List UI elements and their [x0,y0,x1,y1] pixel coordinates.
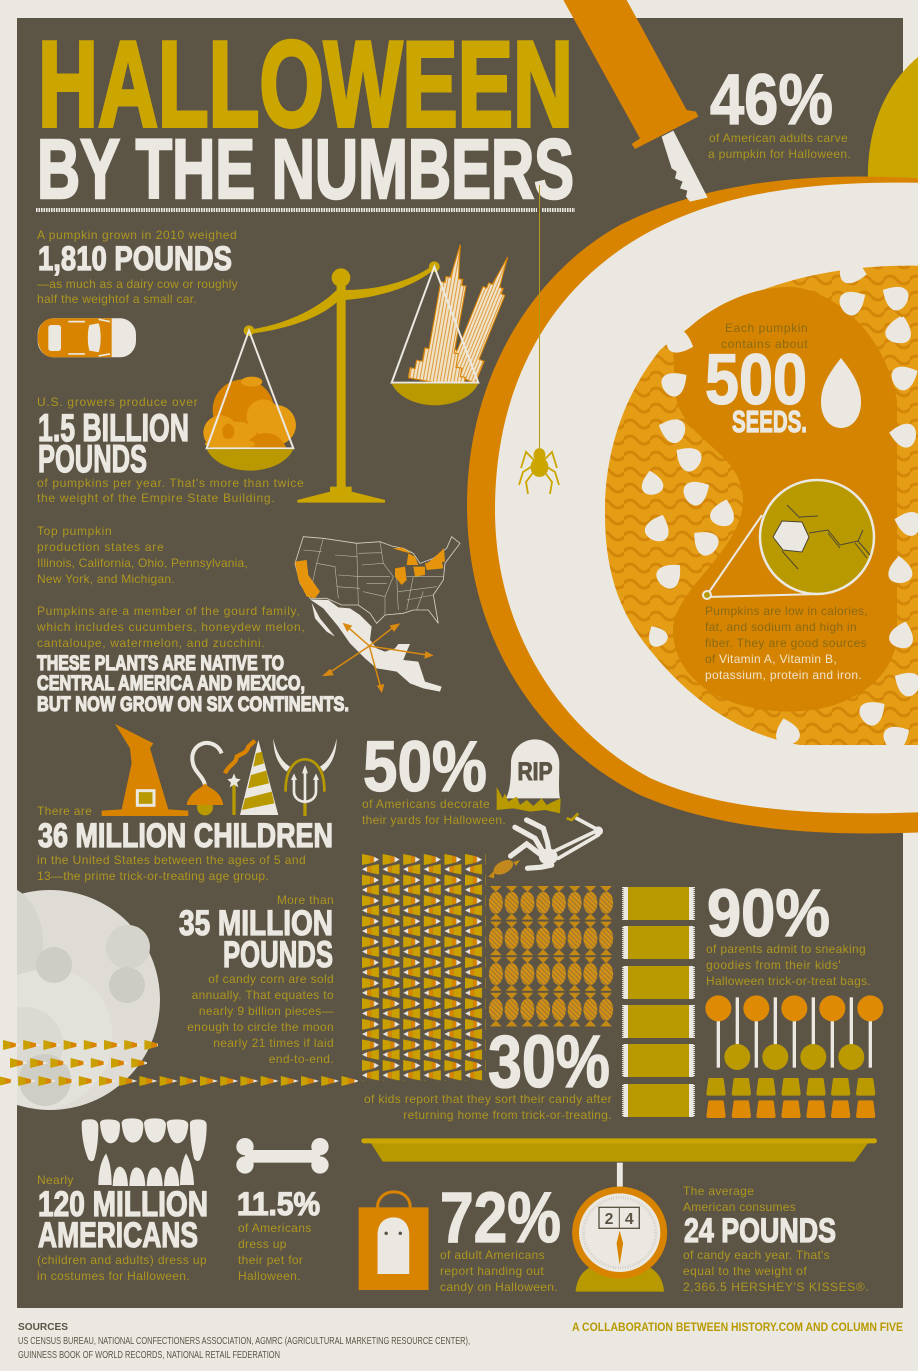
icon: skeleton hand [488,813,603,878]
text: 11.5 percent: their pet for [238,1253,303,1267]
text: 1.5 billion pounds: U.S. growers produce over [37,395,198,409]
text: 30 percent: of kids report that they sort their candy after [364,1092,612,1106]
pumpkin flesh [495,183,918,813]
text: 500 seeds: SEEDS. [732,404,807,439]
dotted rule [36,208,575,212]
text: vitamins: potassium, protein and iron. [705,668,862,682]
left pan [207,331,293,471]
text: gourd family: BUT NOW GROW ON SIX CONTINENTS. [37,693,349,716]
text: 46 percent: a pumpkin for Halloween. [708,147,851,161]
icon: lollipops and gumdrops [705,995,883,1118]
beam [252,265,434,333]
text: 24 pounds: 24 POUNDS [684,1212,836,1250]
witch hat [102,724,188,816]
text: 72 percent: report handing out [440,1264,544,1278]
text: 35 million pounds: nearly 21 times if laid [213,1036,334,1050]
text: 72 percent: candy on Halloween. [440,1280,558,1294]
footer: sources: US CENSUS BUREAU, NATIONAL CONFECTIONERS ASSOCIATION, AGMRC (AGRICULTURAL MARKETING RESOURCE CENTER), [18,1335,470,1347]
footer: sources [18,1321,470,1361]
text: 500 seeds: 500 [705,341,807,420]
text: gourd family: cantaloupe, watermelon, and zucchini. [37,636,265,650]
text: 35 million pounds: 35 MILLION [179,904,333,943]
right pan [392,267,478,405]
icon: moon [17,890,160,1110]
text: vitamins: Vitamin A, Vitamin B, [719,652,837,666]
text: 36 million children: 13—the prime trick-or-treating age group. [37,869,269,883]
text: 500 seeds [705,321,808,439]
icon: bone [236,1138,329,1174]
text: 35 million pounds: enough to circle the moon [187,1020,334,1034]
icon: tombstone: RIP [517,758,553,786]
text: 120 million americans: AMERICANS [38,1216,198,1255]
text: top production states: New York, and Michigan. [37,572,175,586]
icon: weighing scale: 4 [625,1211,634,1228]
text: gourd family: Pumpkins are a member of the gourd family, [37,604,300,618]
text: 30 percent: returning home from trick-or-treating. [403,1108,612,1122]
text: gourd family: THESE PLANTS ARE NATIVE TO [37,652,284,675]
text: 46 percent: of American adults carve [709,131,848,145]
wrapped candy grid [488,885,614,1027]
icon: trick or treat bag [359,1192,429,1290]
spider [519,185,559,494]
text: 30 percent: 30% [488,1020,610,1103]
text: 72 percent [440,1179,561,1294]
state lines [303,538,443,615]
text: 90 percent: 90% [707,876,830,951]
icon: weighing scale [576,1163,664,1292]
text: 1.5 billion pounds [37,395,304,505]
devil horns and trident [273,738,337,816]
text: 1,810 pounds: —as much as a dairy cow or roughly [37,277,238,291]
footer: sources: GUINNESS BOOK OF WORLD RECORDS, NATIONAL RETAIL FEDERATION [18,1349,280,1361]
grass [497,787,561,813]
text: gourd family: which includes cucumbers, honeydew melon, [36,620,305,634]
text: 35 million pounds: POUNDS [223,934,333,975]
icon: weighing scale: 2 [605,1211,614,1228]
text: 1.5 billion pounds: of pumpkins per year. That's more than twice [37,476,304,490]
pumpkin stem [868,57,918,183]
pumpkin rim [467,176,918,833]
text: 24 pounds: American consumes [683,1200,796,1214]
text: 35 million pounds: annually. That equates to [192,988,334,1002]
spread arrows [324,624,432,691]
inner dark blob [673,287,897,712]
text: 30 percent [364,1020,612,1122]
knife blade [662,131,708,202]
text: 24 pounds: 2,366.5 HERSHEY'S KISSES®. [683,1280,869,1294]
pumpkin pile [203,377,296,450]
candy corn grid [362,854,486,1081]
map: North America [295,537,460,692]
text: 120 million americans: Nearly [37,1173,74,1187]
icon: costume accessories [102,724,337,816]
title: BY THE NUMBERS [37,122,574,216]
text: gourd family: CENTRAL AMERICA AND MEXICO, [37,672,305,695]
text: 1,810 pounds [37,228,238,306]
dropped candy [488,857,520,878]
pumpkin [467,176,918,833]
text: 90 percent [706,876,871,988]
text: 120 million americans: in costumes for Halloween. [37,1269,190,1283]
gumdrops [706,1078,875,1096]
text: 35 million pounds: nearly 9 billion pieces— [199,1004,334,1018]
text: 11.5 percent: Halloween. [238,1269,301,1283]
text: 500 seeds: Each pumpkin [725,321,808,335]
text: vitamins: of [705,652,716,666]
text: 36 million children: 36 MILLION CHILDREN [38,817,333,855]
pirate hook [187,743,223,815]
highlighted states [295,547,445,598]
text: 11.5 percent [237,1186,320,1283]
text: 50 percent: 50% [363,728,487,807]
text: 46 percent: 46% [710,61,833,140]
text: 1,810 pounds: half the weightof a small car. [37,292,197,306]
text: 35 million pounds: of candy corn are sold [208,972,334,986]
text: vitamins: Pumpkins are low in calories, [705,604,868,618]
text: 90 percent: of parents admit to sneaking [706,942,866,956]
icon: molecule magnifier [703,480,874,599]
spider body [519,449,559,494]
pillar and base [297,278,385,503]
text: top production states: production states are [37,540,164,554]
text: 120 million americans [37,1173,208,1283]
icon: large seed [821,358,861,428]
icon: vampire teeth [82,1118,207,1186]
text: 11.5 percent: dress up [238,1237,287,1251]
magic wand [225,741,255,815]
title: HALLOWEEN [38,16,573,152]
knife [563,0,708,202]
text: 120 million americans: 120 MILLION [38,1185,208,1224]
Mexico and Central America [310,599,442,692]
text: 72 percent: of adult Americans [440,1248,545,1262]
icon: candy tray [361,1138,877,1162]
candy corn stream [0,1040,358,1086]
text: 36 million children: There are [37,804,92,818]
text: 24 pounds [683,1184,869,1294]
text: 90 percent: goodies from their kids' [706,958,841,972]
text: gourd family [36,604,349,716]
party hat [240,740,278,815]
pumpkin core [605,266,918,745]
text: 500 seeds: contains about [721,337,808,351]
text: top production states [37,524,248,586]
text: 72 percent: 72% [440,1179,561,1258]
text: 1.5 billion pounds: POUNDS [38,438,147,481]
text: 24 pounds: The average [683,1184,754,1198]
text: 50 percent: their yards for Halloween. [362,813,506,827]
text: 24 pounds: of candy each year. That's [683,1248,830,1262]
text: 11.5 percent: of Americans [238,1221,312,1235]
text: vitamins: fat, and sodium and high in [705,620,857,634]
chocolate bars [622,886,695,1118]
empire state buildings [408,244,508,382]
USA outline [295,537,460,623]
title [37,16,574,216]
text: top production states: Top pumpkin [37,524,112,538]
text: 35 million pounds: More than [277,893,334,907]
text: 24 pounds: equal to the weight of [683,1264,807,1278]
text: 90 percent: Halloween trick-or-treat bags. [706,974,871,988]
text: 35 million pounds [179,893,334,1066]
pumpkin seeds [639,258,918,754]
text: top production states: Illinois, California, Ohio, Pennsylvania, [37,556,248,570]
text: 50 percent: of Americans decorate [362,797,490,811]
text: 36 million children [37,804,333,883]
icon: tombstone [497,739,561,813]
spider thread [538,185,540,448]
icon: car [38,318,136,357]
footer: sources: SOURCES [18,1321,68,1333]
text: 35 million pounds: end-to-end. [269,1052,334,1066]
text: vitamins: fiber. They are good sources [705,636,867,650]
text: 120 million americans: (children and adults) dress up [37,1253,207,1267]
text: 36 million children: in the United States between the ages of 5 and [37,853,306,867]
knife handle [563,0,698,149]
text: vitamins [705,604,868,682]
text: 1.5 billion pounds: the weight of the Empire State Building. [37,491,275,505]
text: 1.5 billion pounds: 1.5 BILLION [38,407,189,450]
text: 1,810 pounds: 1,810 POUNDS [38,240,232,278]
text: 11.5 percent: 11.5% [237,1186,320,1222]
text: 1,810 pounds: A pumpkin grown in 2010 weighed [37,228,237,242]
icon: balance scale [203,240,524,503]
